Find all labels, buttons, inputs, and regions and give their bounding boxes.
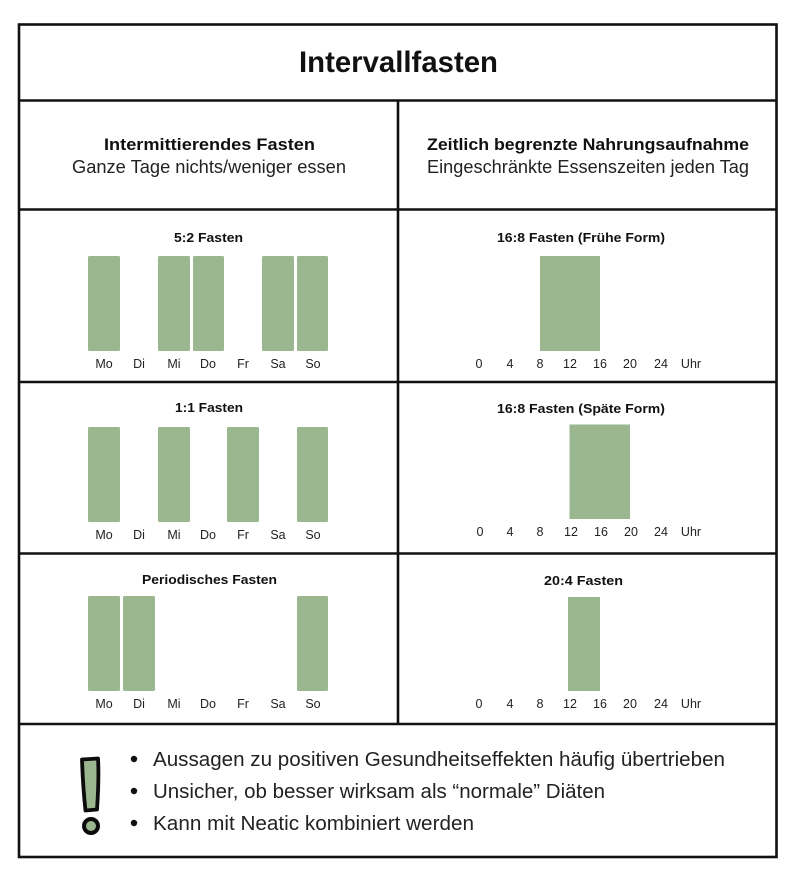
panel: 16:8 Fasten (Späte Form) (477, 401, 701, 539)
panel: 20:4 Fasten: 24 (654, 697, 668, 711)
panel: 20:4 Fasten: 4 (507, 697, 514, 711)
panel: 1:1 Fasten: 1:1 Fasten (175, 400, 243, 415)
title: Intervallfasten (299, 46, 498, 79)
notes list: Kann mit Neatic kombiniert werden (153, 813, 474, 835)
panel: 20:4 Fasten: 20 (623, 697, 637, 711)
panel: 16:8 Fasten (Späte Form): 8 (537, 525, 544, 539)
panel: 16:8 Fasten (Frühe Form): 20 (623, 357, 637, 371)
panel: 20:4 Fasten: 16 (593, 697, 607, 711)
panel: 5:2 Fasten: Sa (270, 357, 286, 371)
panel: 5:2 Fasten: Mi (167, 357, 181, 371)
panel: 5:2 Fasten: Di (133, 357, 145, 371)
panel: 1:1 Fasten: Sa (270, 528, 286, 542)
panel: 20:4 Fasten (476, 573, 701, 711)
column header: Intermittierendes Fasten: Intermittierendes Fasten (104, 135, 315, 154)
notes list: Unsicher, ob besser wirksam als “normale” Diäten (153, 781, 605, 803)
panel: 1:1 Fasten (88, 400, 328, 542)
panel: Periodisches Fasten: Sa (270, 697, 286, 711)
notes list: Aussagen zu positiven Gesundheitseffekten häufig übertrieben (153, 749, 725, 771)
panel: Periodisches Fasten (88, 572, 328, 711)
panel: 16:8 Fasten (Frühe Form): 16:8 Fasten (Frühe Form) (497, 230, 665, 245)
panel: 20:4 Fasten: 0 (476, 697, 483, 711)
panel: Periodisches Fasten: Mo (95, 697, 113, 711)
panel: 16:8 Fasten (Späte Form): 12 (564, 525, 578, 539)
panel: 5:2 Fasten: So (305, 357, 321, 371)
panel: Periodisches Fasten: So (305, 697, 321, 711)
panel: 16:8 Fasten (Frühe Form): Uhr (681, 357, 701, 371)
panel: 16:8 Fasten (Späte Form): 24 (654, 525, 668, 539)
panel: 5:2 Fasten (88, 230, 328, 371)
panel: 1:1 Fasten: Mo (95, 528, 113, 542)
panel: 16:8 Fasten (Frühe Form) (476, 230, 701, 371)
column header: Intermittierendes Fasten: Ganze Tage nichts/weniger essen (72, 157, 346, 177)
panel: 20:4 Fasten: 20:4 Fasten (544, 573, 623, 588)
panel: 1:1 Fasten: Fr (237, 528, 249, 542)
panel: 5:2 Fasten: 5:2 Fasten (174, 230, 243, 245)
panel: 16:8 Fasten (Späte Form): 4 (507, 525, 514, 539)
panel: 16:8 Fasten (Späte Form): 20 (624, 525, 638, 539)
panel: 16:8 Fasten (Späte Form): 0 (477, 525, 484, 539)
column header: Zeitlich begrenzte Nahrungsaufnahme: Eingeschränkte Essenszeiten jeden Tag (427, 157, 749, 177)
panel: Periodisches Fasten: Periodisches Fasten (142, 572, 277, 587)
panel: 5:2 Fasten: Mo (95, 357, 113, 371)
column header: Zeitlich begrenzte Nahrungsaufnahme (427, 135, 749, 177)
panel: Periodisches Fasten: Di (133, 697, 145, 711)
panel: 20:4 Fasten: Uhr (681, 697, 701, 711)
panel: 16:8 Fasten (Späte Form): Uhr (681, 525, 701, 539)
panel: Periodisches Fasten: Fr (237, 697, 249, 711)
panel: 20:4 Fasten: 12 (563, 697, 577, 711)
column header: Zeitlich begrenzte Nahrungsaufnahme: Zeitlich begrenzte Nahrungsaufnahme (427, 135, 749, 154)
panel: 5:2 Fasten: Do (200, 357, 216, 371)
panel: 16:8 Fasten (Späte Form): 16:8 Fasten (Späte Form) (497, 401, 665, 416)
panel: 1:1 Fasten: So (305, 528, 321, 542)
panel: 5:2 Fasten: Fr (237, 357, 249, 371)
panel: 1:1 Fasten: Mi (167, 528, 181, 542)
panel: 16:8 Fasten (Frühe Form): 16 (593, 357, 607, 371)
panel: Periodisches Fasten: Do (200, 697, 216, 711)
panel: 20:4 Fasten: 8 (537, 697, 544, 711)
panel: 16:8 Fasten (Späte Form): 16 (594, 525, 608, 539)
icon: exclamation mark (82, 758, 98, 833)
notes list (131, 749, 725, 835)
column header: Intermittierendes Fasten (72, 135, 346, 177)
panel: 1:1 Fasten: Di (133, 528, 145, 542)
panel: 16:8 Fasten (Frühe Form): 8 (537, 357, 544, 371)
panel: 16:8 Fasten (Frühe Form): 12 (563, 357, 577, 371)
panel: Periodisches Fasten: Mi (167, 697, 181, 711)
panel: 16:8 Fasten (Frühe Form): 24 (654, 357, 668, 371)
panel: 16:8 Fasten (Frühe Form): 0 (476, 357, 483, 371)
panel: 16:8 Fasten (Frühe Form): 4 (507, 357, 514, 371)
panel: 1:1 Fasten: Do (200, 528, 216, 542)
